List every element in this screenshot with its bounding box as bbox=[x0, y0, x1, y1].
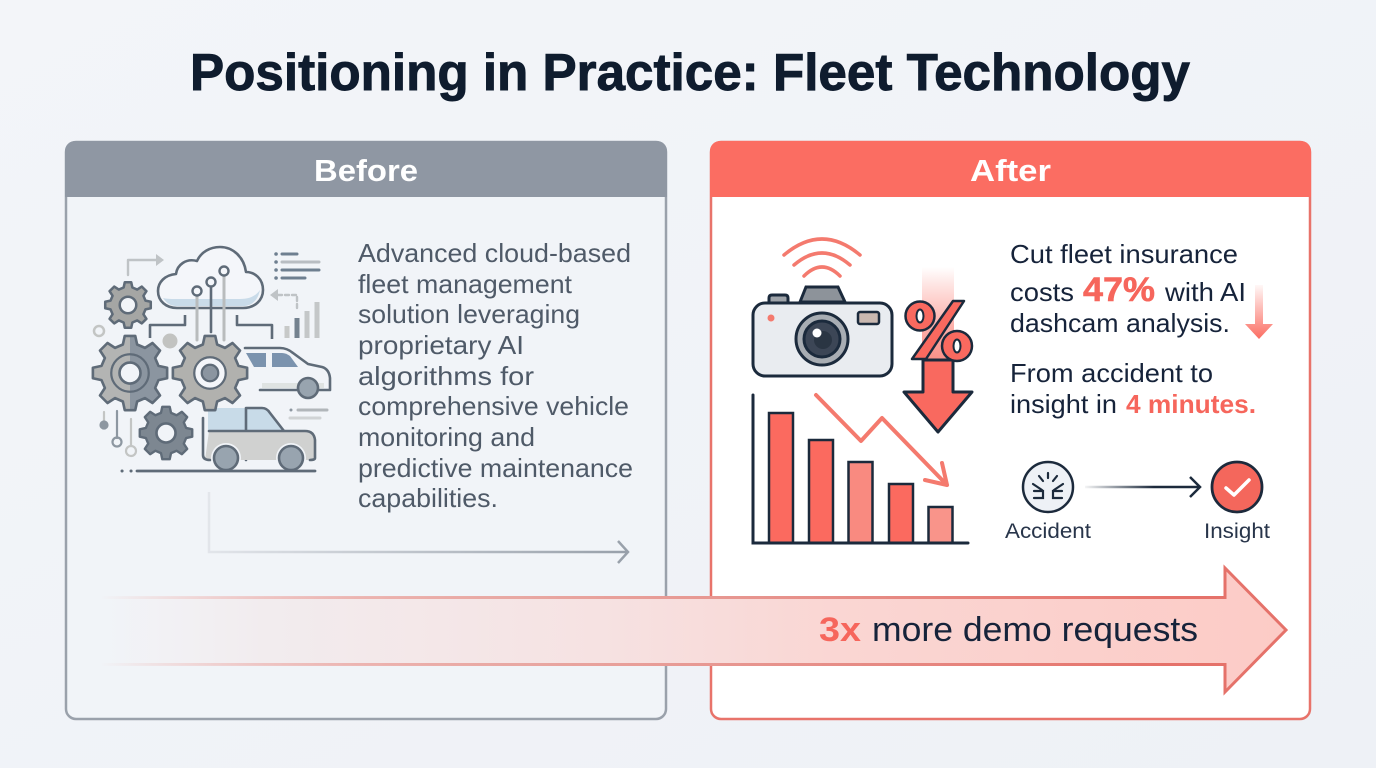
list lines bbox=[276, 254, 319, 278]
after message one: costs bbox=[1010, 277, 1074, 307]
before description text: fleet management bbox=[358, 269, 573, 299]
icon: dashcam camera bbox=[753, 287, 892, 376]
icon: car bbox=[245, 348, 330, 398]
flow: accident to insight bbox=[1005, 462, 1270, 543]
connectors bbox=[150, 315, 272, 339]
panel: before bbox=[65, 141, 667, 719]
icon: insight check bbox=[1212, 462, 1262, 512]
label: insight: Insight bbox=[1204, 520, 1270, 543]
before description text: algorithms for bbox=[358, 361, 534, 391]
before panel body bbox=[66, 142, 666, 719]
icon: cloud bbox=[158, 247, 263, 340]
before description text: Advanced cloud-based bbox=[358, 238, 631, 268]
before description text: proprietary AI bbox=[358, 330, 524, 360]
icon: gear low bbox=[140, 407, 192, 459]
panel: after bbox=[710, 141, 1311, 719]
icon: accident bbox=[1023, 462, 1073, 512]
icon: gear large middle bbox=[173, 336, 247, 410]
icon: pickup truck bbox=[122, 408, 327, 473]
icon: gear large left bbox=[93, 336, 167, 410]
bar chart: declining costs bbox=[753, 395, 968, 543]
after message two bbox=[1010, 358, 1256, 419]
after message two: From accident to bbox=[1010, 358, 1213, 388]
before description text: comprehensive vehicle bbox=[358, 391, 629, 421]
after message one: dashcam analysis. bbox=[1010, 308, 1230, 338]
circuit pins bbox=[100, 411, 136, 456]
before description text: capabilities. bbox=[358, 483, 498, 513]
after message two: 4 minutes. bbox=[1126, 389, 1256, 419]
before description text: solution leveraging bbox=[358, 299, 580, 329]
arrow: big result arrow bbox=[100, 568, 1287, 692]
after message one: with AI bbox=[1164, 277, 1246, 307]
after message two: insight in bbox=[1010, 389, 1117, 419]
before header bar bbox=[65, 141, 667, 197]
after message one: Cut fleet insurance bbox=[1010, 239, 1238, 269]
label: accident: Accident bbox=[1005, 520, 1091, 543]
before heading: Before bbox=[314, 153, 418, 188]
mini bar chart bbox=[284, 302, 320, 338]
icon: wifi signal bbox=[784, 239, 860, 276]
after header bar bbox=[710, 141, 1311, 197]
after message one bbox=[1010, 239, 1246, 338]
before description text bbox=[358, 238, 633, 513]
icon: small red down arrow bbox=[1245, 285, 1273, 339]
decorative dots bbox=[94, 326, 178, 348]
arrow: accident to insight bbox=[1085, 477, 1200, 497]
title: Positioning in Practice: Fleet Technology bbox=[190, 44, 1190, 102]
icon: cloud fleet technology illustration bbox=[93, 247, 330, 473]
before description text: monitoring and bbox=[358, 422, 535, 452]
after panel body bbox=[711, 142, 1310, 719]
arrow: top left bbox=[128, 254, 164, 275]
result value: 3x bbox=[819, 611, 861, 649]
icon: percent with down arrow bbox=[904, 267, 972, 432]
arrow: dashed return bbox=[270, 289, 297, 308]
after message one: 47% bbox=[1083, 271, 1155, 309]
result label: more demo requests bbox=[872, 611, 1198, 649]
after heading: After bbox=[970, 153, 1051, 188]
icon: gear small top bbox=[105, 282, 151, 328]
before description text: predictive maintenance bbox=[358, 453, 633, 483]
arrow: L-shaped thin arrow bbox=[209, 492, 628, 563]
